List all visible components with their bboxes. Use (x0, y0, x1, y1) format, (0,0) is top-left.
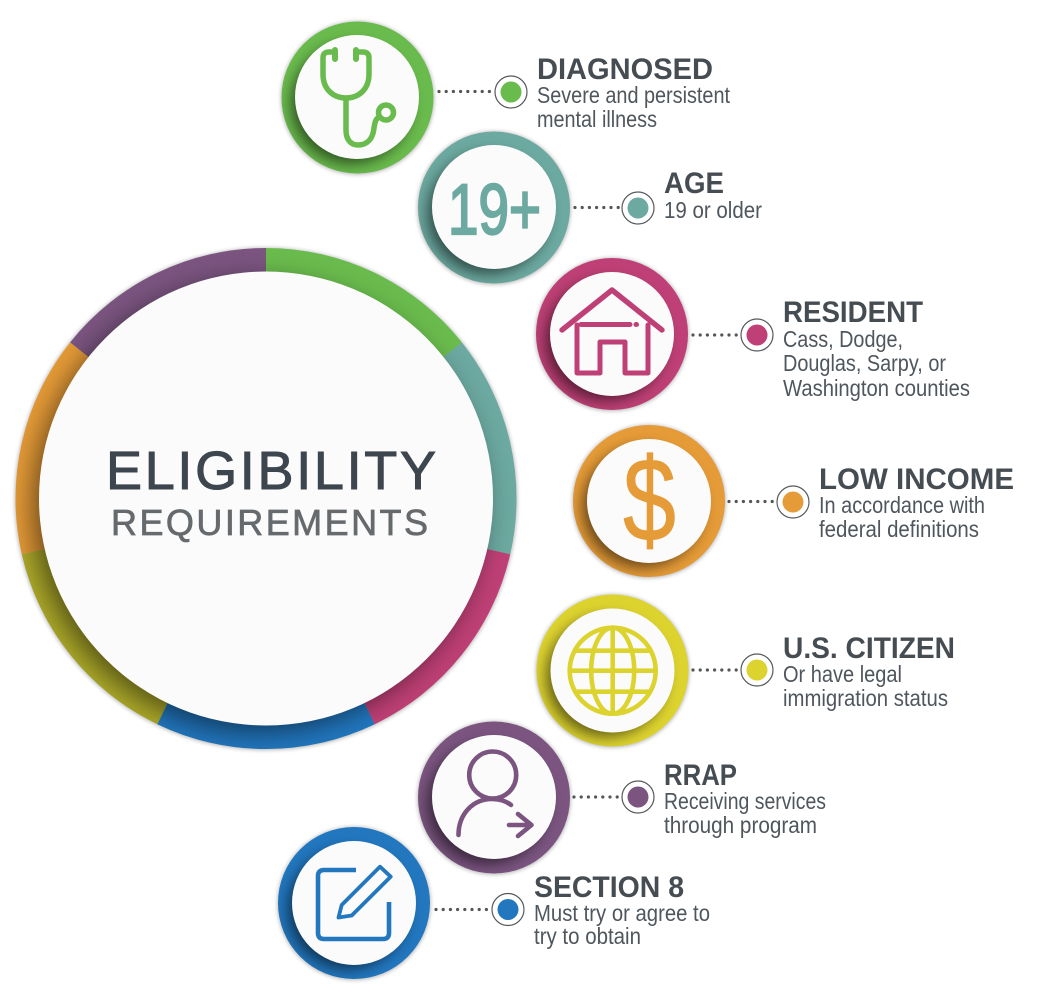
label: resident: Washington counties (783, 375, 970, 401)
label: low income: federal definitions (819, 516, 979, 542)
label: resident: Douglas, Sarpy, or (783, 350, 946, 376)
label: diagnosed: mental illness (537, 106, 657, 132)
label: age: AGE (664, 167, 724, 200)
label: rrap (664, 759, 826, 838)
icon: stethoscope (323, 50, 394, 145)
label: rrap: RRAP (664, 759, 737, 792)
marker (495, 76, 527, 108)
connector dots (574, 795, 619, 799)
connector dots (436, 908, 488, 911)
connector dots (729, 500, 774, 503)
label: low income: LOW INCOME (819, 463, 1014, 496)
label: resident (783, 296, 970, 401)
title: eligibility: ELIGIBILITY (106, 441, 436, 501)
badge: stethoscope (281, 22, 434, 174)
label: section 8: Must try or agree to (534, 900, 710, 926)
item: diagnosed (281, 22, 731, 174)
label: age: 19 or older (664, 197, 762, 223)
central eligibility circle (15, 248, 517, 750)
label: us citizen (783, 632, 955, 711)
marker (492, 894, 524, 926)
label: rrap: Receiving services (664, 788, 826, 814)
marker (777, 486, 809, 518)
marker (622, 192, 654, 224)
icon: dollar sign: $ (623, 434, 676, 566)
connector dots (575, 206, 619, 209)
label: us citizen: immigration status (783, 685, 948, 711)
badge: 19+ (418, 132, 570, 284)
icon: 19+: 19+ (448, 171, 541, 250)
item: resident (536, 258, 970, 411)
badge: edit (278, 827, 430, 980)
badge: globe (536, 594, 689, 748)
connector dots (693, 668, 738, 672)
icon: person with arrow (458, 752, 532, 836)
label: resident: Cass, Dodge, (783, 326, 903, 352)
icon: globe (570, 628, 656, 714)
label: low income: In accordance with (819, 492, 985, 518)
label: section 8: SECTION 8 (534, 871, 684, 904)
item: us citizen (536, 594, 955, 748)
connector dots (439, 90, 491, 93)
item: low income (572, 425, 1014, 578)
item: section 8 (278, 827, 710, 980)
marker (741, 319, 773, 351)
badge: person (418, 722, 570, 874)
label: us citizen: Or have legal (783, 661, 902, 687)
label: diagnosed: DIAGNOSED (537, 53, 713, 86)
item: age (418, 132, 762, 284)
label: resident: RESIDENT (783, 296, 923, 329)
label: rrap: through program (664, 812, 817, 838)
connector dots (693, 333, 738, 337)
marker (741, 654, 773, 686)
label: section 8 (534, 871, 710, 949)
label: low income (819, 463, 1014, 542)
label: diagnosed (537, 53, 731, 132)
icon: house (562, 290, 662, 373)
label: age (664, 167, 762, 223)
segmented colour ring (16, 248, 516, 749)
subtitle: requirements: REQUIREMENTS (111, 502, 428, 543)
marker (622, 781, 654, 813)
label: diagnosed: Severe and persistent (537, 82, 731, 108)
item: rrap (418, 722, 826, 874)
badge: house (536, 258, 688, 411)
icon: pencil and box (318, 867, 391, 939)
badge: dollar (572, 425, 726, 578)
label: section 8: try to obtain (534, 923, 641, 949)
label: us citizen: U.S. CITIZEN (783, 632, 955, 665)
